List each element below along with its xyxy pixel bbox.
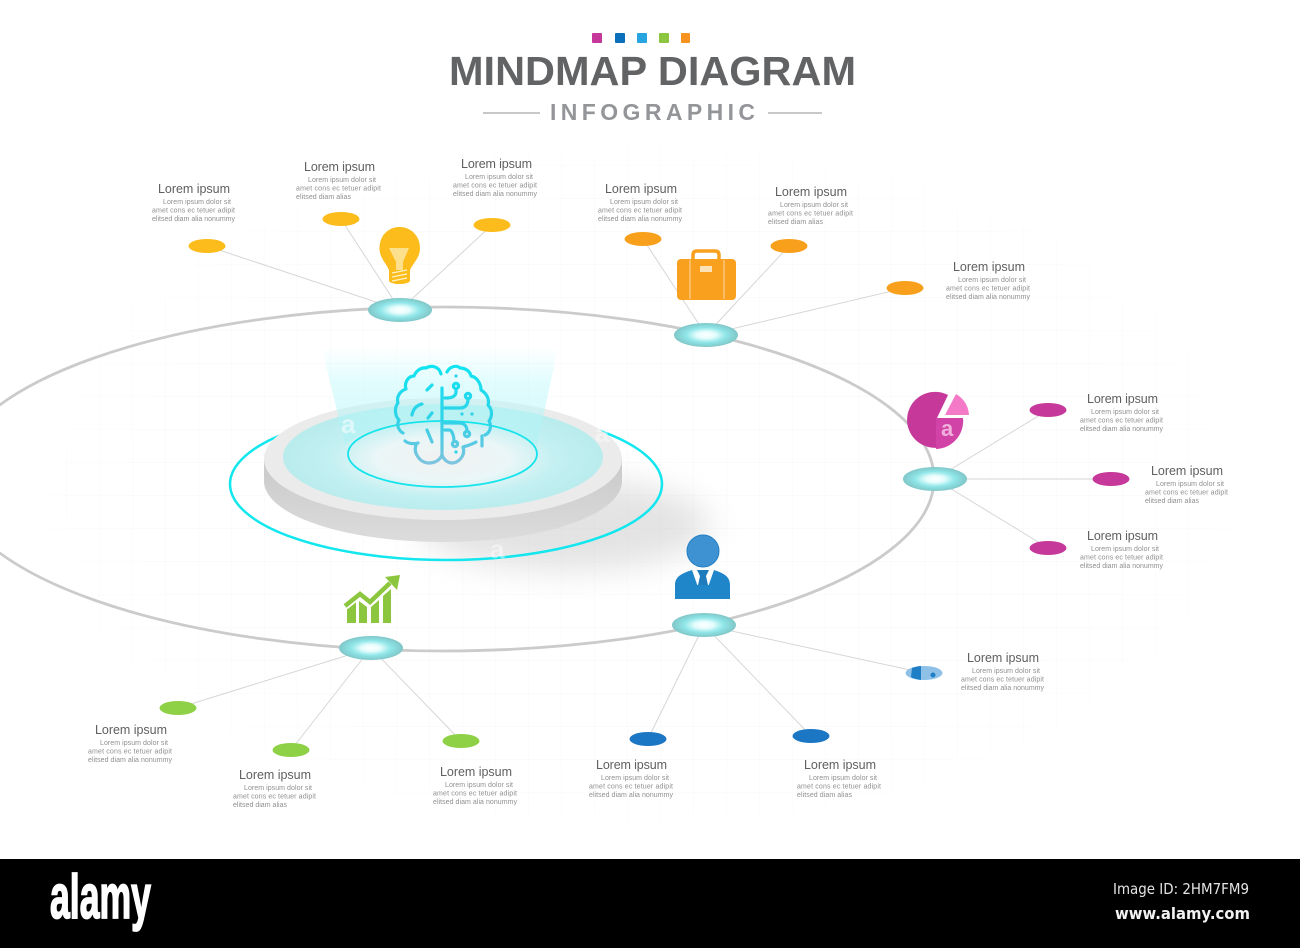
node dots <box>624 232 662 246</box>
text: yellow 1: Lorem ipsum dolor sit <box>163 199 231 206</box>
text: magenta 3: amet cons ec tetuer adipit <box>1080 554 1163 562</box>
icon: growth chart <box>345 575 400 623</box>
text: green 1: elitsed diam alia nonummy <box>88 757 172 764</box>
text: blue 2: Lorem ipsum <box>804 758 876 772</box>
connector lines <box>207 219 492 310</box>
text: blue 1 <box>961 651 1044 692</box>
hub <box>339 636 403 660</box>
platform top <box>264 398 622 520</box>
text: orange 1: Lorem ipsum <box>605 182 677 196</box>
platform shadow <box>420 479 710 571</box>
text: green 3: Lorem ipsum <box>440 765 512 779</box>
text: blue 3: Lorem ipsum <box>596 758 667 772</box>
text: orange 2 <box>768 185 853 226</box>
orbit ring <box>0 307 934 651</box>
text: green 3 <box>433 765 518 806</box>
outer glow ring <box>230 408 662 560</box>
text: yellow 1: Lorem ipsum <box>158 182 230 196</box>
text: blue 3: amet cons ec tetuer adipit <box>589 784 673 790</box>
text: green 2: elitsed diam alias <box>233 802 288 809</box>
text: magenta 1: Lorem ipsum dolor sit <box>1091 409 1159 416</box>
text: orange 3: elitsed diam alia nonummy <box>946 294 1030 301</box>
text: yellow 2: elitsed diam alias <box>296 194 352 201</box>
node dots <box>160 701 196 715</box>
connector lines <box>178 648 461 750</box>
text: magenta 2: elitsed diam alias <box>1145 498 1200 505</box>
text: blue 3 <box>589 758 674 799</box>
background grid <box>30 140 1250 830</box>
text: blue 3: elitsed diam alia nonummy <box>589 792 674 799</box>
text: green 1: amet cons ec tetuer adipit <box>88 748 172 756</box>
text: magenta 1: Lorem ipsum <box>1087 392 1158 406</box>
text: yellow 1: amet cons ec tetuer adipit <box>152 208 235 214</box>
text: magenta 2: Lorem ipsum <box>1151 464 1223 478</box>
branch: yellow <box>152 157 538 322</box>
text: orange 2: elitsed diam alias <box>768 219 824 226</box>
text: magenta 3: Lorem ipsum <box>1087 529 1158 543</box>
text: yellow 3: elitsed diam alia nonummy <box>453 191 538 198</box>
icon: pie chart <box>907 392 969 449</box>
text: yellow 3 <box>453 157 538 198</box>
text: green 3: Lorem ipsum dolor sit <box>445 782 513 789</box>
watermark marks: a <box>595 418 610 448</box>
node dots <box>188 239 226 253</box>
text: magenta 3 <box>1080 529 1164 570</box>
footer logo: alamy <box>50 863 151 932</box>
connector lines <box>648 625 924 739</box>
subtitle: INFOGRAPHIC <box>550 99 755 125</box>
text: green 1 <box>88 723 172 764</box>
text: magenta 3: elitsed diam alia nonummy <box>1080 563 1164 570</box>
text: yellow 3: Lorem ipsum dolor sit <box>465 174 533 181</box>
hub <box>903 467 967 491</box>
text: blue 2: elitsed diam alias <box>797 792 852 799</box>
text: magenta 3: Lorem ipsum dolor sit <box>1091 546 1159 553</box>
text: orange 2: amet cons ec tetuer adipit <box>768 210 853 218</box>
text: green 2: Lorem ipsum <box>239 768 311 782</box>
text: orange 2: Lorem ipsum dolor sit <box>780 202 848 209</box>
text: orange 3: Lorem ipsum <box>953 260 1025 274</box>
text: yellow 2 <box>296 160 381 201</box>
cyan plate <box>283 404 603 510</box>
footer image id: Image ID: 2HM7FM9 <box>1113 880 1249 898</box>
hub <box>672 613 736 637</box>
light beam <box>322 348 558 445</box>
text: green 2 <box>233 768 316 809</box>
central platform <box>230 348 710 571</box>
icon: brain <box>395 366 492 463</box>
branch: blue <box>589 535 1044 799</box>
text: yellow 2: Lorem ipsum dolor sit <box>308 177 376 184</box>
text: green 2: amet cons ec tetuer adipit <box>233 794 316 800</box>
branch: magenta <box>903 392 1228 570</box>
text: blue 2: Lorem ipsum dolor sit <box>809 775 877 782</box>
text: yellow 1 <box>152 182 236 223</box>
node dots <box>906 666 942 680</box>
text: orange 3 <box>946 260 1030 301</box>
text: green 2: Lorem ipsum dolor sit <box>244 785 312 792</box>
watermark marks: a <box>341 409 356 439</box>
title: MINDMAP DIAGRAM <box>449 48 856 94</box>
text: orange 1 <box>598 182 682 223</box>
node dots <box>1030 403 1066 417</box>
text: green 1: Lorem ipsum dolor sit <box>100 740 168 747</box>
hub <box>674 323 738 347</box>
text: blue 1: elitsed diam alia nonummy <box>961 685 1044 692</box>
icon: briefcase <box>677 251 736 300</box>
text: magenta 2: amet cons ec tetuer adipit <box>1145 490 1228 496</box>
text: blue 3: Lorem ipsum dolor sit <box>601 775 669 782</box>
platform side <box>264 459 622 542</box>
branch: green <box>88 575 518 809</box>
text: yellow 1: elitsed diam alia nonummy <box>152 216 236 223</box>
text: yellow 2: amet cons ec tetuer adipit <box>296 186 381 192</box>
text: magenta 2 <box>1145 464 1228 505</box>
text: magenta 2: Lorem ipsum dolor sit <box>1156 481 1224 488</box>
hub <box>368 298 432 322</box>
text: yellow 3: Lorem ipsum <box>461 157 532 171</box>
text: green 3: amet cons ec tetuer adipit <box>433 790 517 798</box>
text: magenta 1 <box>1080 392 1164 433</box>
text: yellow 3: amet cons ec tetuer adipit <box>453 182 537 190</box>
text: magenta 1: amet cons ec tetuer adipit <box>1080 418 1163 424</box>
footer url: www.alamy.com <box>1115 904 1250 923</box>
text: green 1: Lorem ipsum <box>95 723 167 737</box>
text: blue 1: amet cons ec tetuer adipit <box>961 676 1044 684</box>
connector lines <box>935 410 1111 548</box>
icon: business person <box>675 535 730 599</box>
text: orange 2: Lorem ipsum <box>775 185 847 199</box>
text: orange 3: Lorem ipsum dolor sit <box>958 277 1026 284</box>
text: orange 1: Lorem ipsum dolor sit <box>610 199 678 206</box>
colour squares <box>592 33 690 43</box>
inner ring <box>348 421 537 487</box>
text: blue 2: amet cons ec tetuer adipit <box>797 784 881 790</box>
watermark marks <box>341 409 610 564</box>
icon: pie chart: a <box>941 416 954 441</box>
text: orange 1: elitsed diam alia nonummy <box>598 216 682 223</box>
text: magenta 1: elitsed diam alia nonummy <box>1080 426 1164 433</box>
text: blue 2 <box>797 758 881 799</box>
text: green 3: elitsed diam alia nonummy <box>433 799 518 806</box>
text: blue 1: Lorem ipsum dolor sit <box>972 668 1040 675</box>
branch: orange <box>598 182 1030 347</box>
connector lines <box>643 239 905 335</box>
text: blue 1: Lorem ipsum <box>967 651 1039 665</box>
text: orange 1: amet cons ec tetuer adipit <box>598 208 682 214</box>
watermark marks: a <box>490 534 505 564</box>
text: yellow 2: Lorem ipsum <box>304 160 375 174</box>
text: orange 3: amet cons ec tetuer adipit <box>946 286 1030 292</box>
stock footer bar <box>0 859 1300 948</box>
title block <box>449 33 856 125</box>
icon: light bulb <box>380 227 420 284</box>
